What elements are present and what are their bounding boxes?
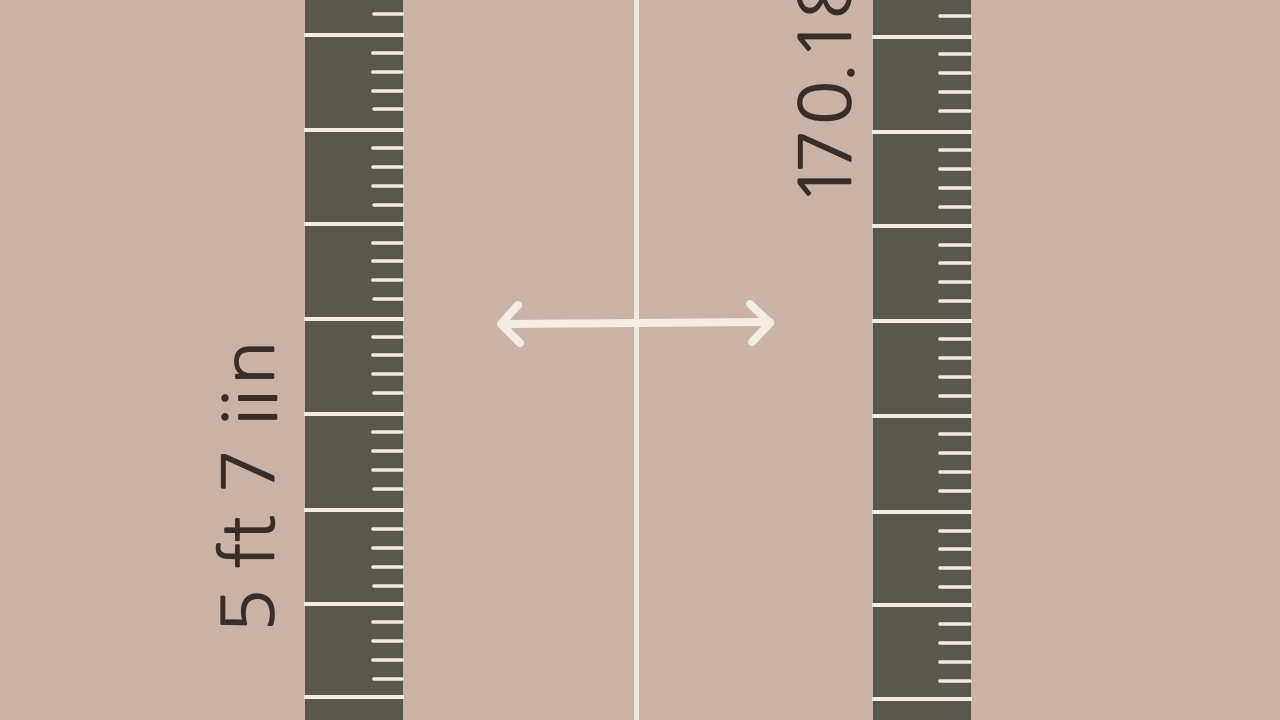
right ruler (872, 0, 972, 720)
left ruler label: 5 ft 7 iin: 5 ft 7 iin (215, 340, 285, 633)
centre vertical line (634, 0, 639, 720)
left ruler (304, 0, 404, 720)
double-headed arrow (501, 304, 770, 343)
